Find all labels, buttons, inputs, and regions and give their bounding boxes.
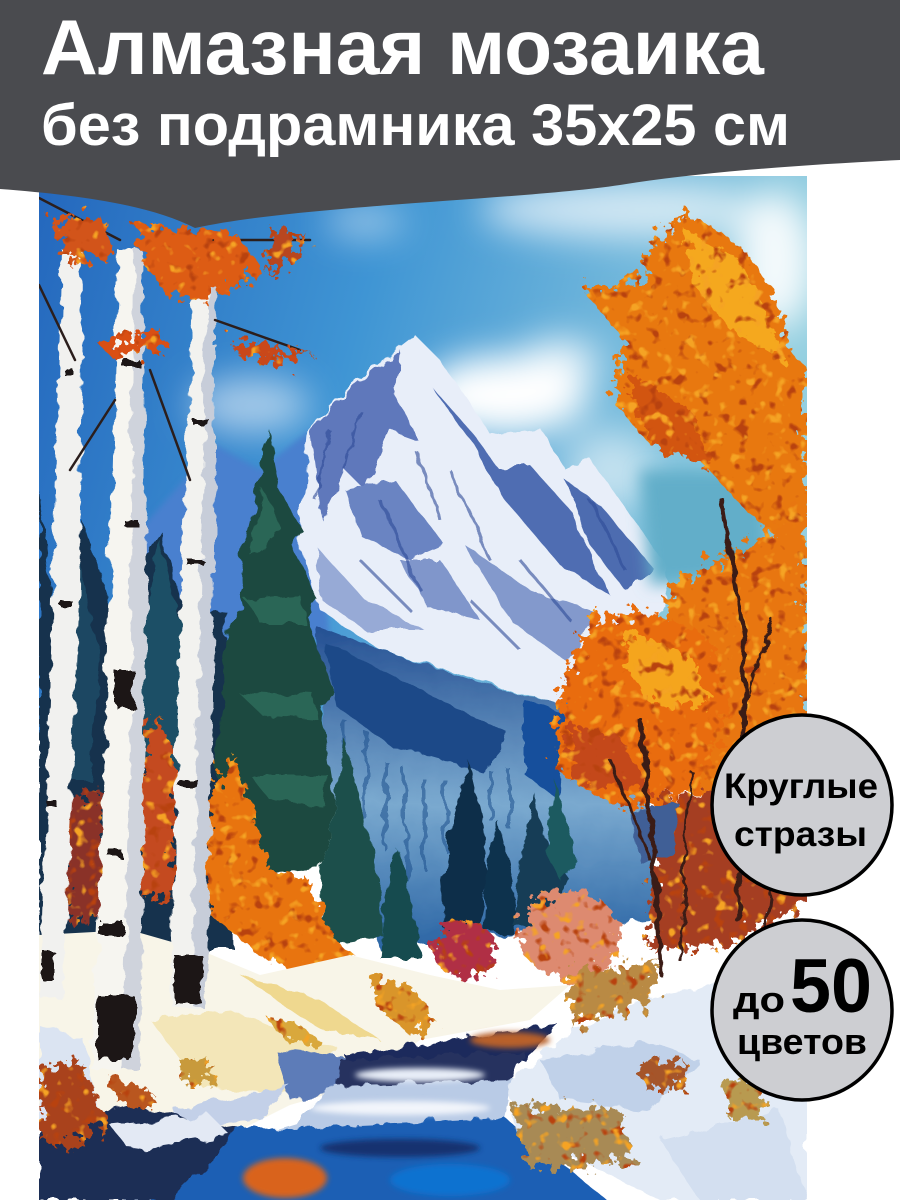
conifer highlights (236, 490, 328, 805)
left branches (39, 198, 310, 480)
badge: up to 50 colours: цветов (737, 1021, 867, 1062)
bottom left rocks (39, 1105, 240, 1200)
small conifers (320, 738, 578, 958)
main snowy mountain (298, 335, 668, 705)
badge: up to 50 colours: 50 (790, 944, 872, 1029)
header banner (0, 0, 900, 228)
far mountains (140, 430, 330, 640)
stream highlights (243, 1032, 550, 1198)
subtitle: без подрамника 35х25 см (41, 93, 790, 158)
painting: mountain landscape (39, 176, 815, 1200)
left snow bank (39, 930, 570, 1135)
dry grass (370, 975, 435, 1035)
pink bushes (433, 891, 620, 979)
badge: round rhinestones: стразы (734, 815, 867, 854)
birch trunks (40, 240, 216, 1070)
big conifer (212, 428, 335, 875)
slope tree streaks (345, 720, 510, 880)
right snow bank (508, 982, 807, 1200)
clouds (190, 182, 815, 510)
badge: up to 50 colours (712, 920, 892, 1100)
forested slope (315, 625, 660, 950)
red bush left (135, 710, 175, 900)
dark left forest (39, 490, 235, 950)
badge: round rhinestones (712, 715, 892, 895)
birch bark marks (42, 360, 210, 1060)
right tree trunks (610, 500, 780, 975)
title: Алмазная мозаика (41, 3, 765, 91)
orange bushes left (204, 752, 356, 969)
left orange leaves (55, 215, 312, 364)
lower right red foliage (650, 780, 807, 950)
right orange tree: upper crown (582, 212, 807, 560)
stream (110, 1025, 620, 1200)
badge: up to 50 colours: до (733, 979, 785, 1020)
right sky behind trees (640, 470, 770, 585)
sky (39, 176, 807, 736)
mountain brush streaks (315, 410, 625, 650)
badge: round rhinestones: Круглые (724, 767, 878, 806)
right orange tree: middle mass (555, 510, 807, 810)
